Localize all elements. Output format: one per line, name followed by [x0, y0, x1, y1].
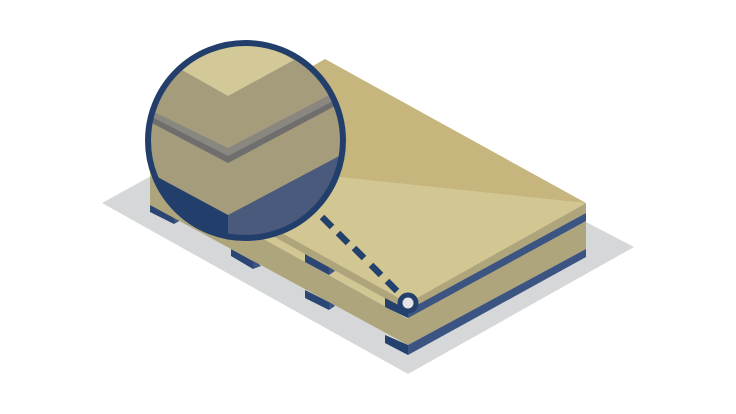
pad: middle left — [231, 249, 261, 269]
illustration: layered slab with magnified detail — [102, 40, 634, 374]
front upper pad and navy strip — [385, 213, 586, 318]
upper pads — [305, 254, 335, 275]
marker ring — [400, 295, 416, 311]
top slab right edge — [408, 203, 586, 311]
lower slab left face — [150, 176, 408, 345]
upper pad: middle — [305, 254, 335, 275]
lens top surface — [182, 46, 294, 96]
lens background — [151, 54, 340, 215]
lens contents — [151, 46, 340, 235]
top slab left edge — [150, 160, 408, 311]
lens grey band shadow — [150, 100, 335, 163]
ground shadow — [102, 171, 634, 374]
lens navy left face — [158, 178, 228, 234]
magnifier lens — [145, 40, 346, 241]
lens ring — [148, 43, 343, 238]
pad: far left — [150, 205, 181, 224]
lower slab — [150, 176, 586, 345]
lens grey band — [150, 92, 335, 156]
pad: middle right — [305, 290, 335, 310]
front upper pad left — [385, 298, 408, 318]
lower pads — [150, 205, 335, 310]
light band on lower slab — [150, 168, 385, 306]
top slab — [150, 59, 586, 311]
lens blue right face — [228, 156, 339, 235]
front pad left — [385, 335, 408, 355]
front lower pad and base strip — [385, 249, 586, 355]
navy strip right — [408, 213, 586, 318]
top surface front highlight — [250, 177, 586, 303]
top surface back — [150, 59, 586, 303]
lower slab right face — [408, 221, 586, 345]
dashed leader line — [322, 217, 397, 291]
base strip right — [408, 249, 586, 355]
